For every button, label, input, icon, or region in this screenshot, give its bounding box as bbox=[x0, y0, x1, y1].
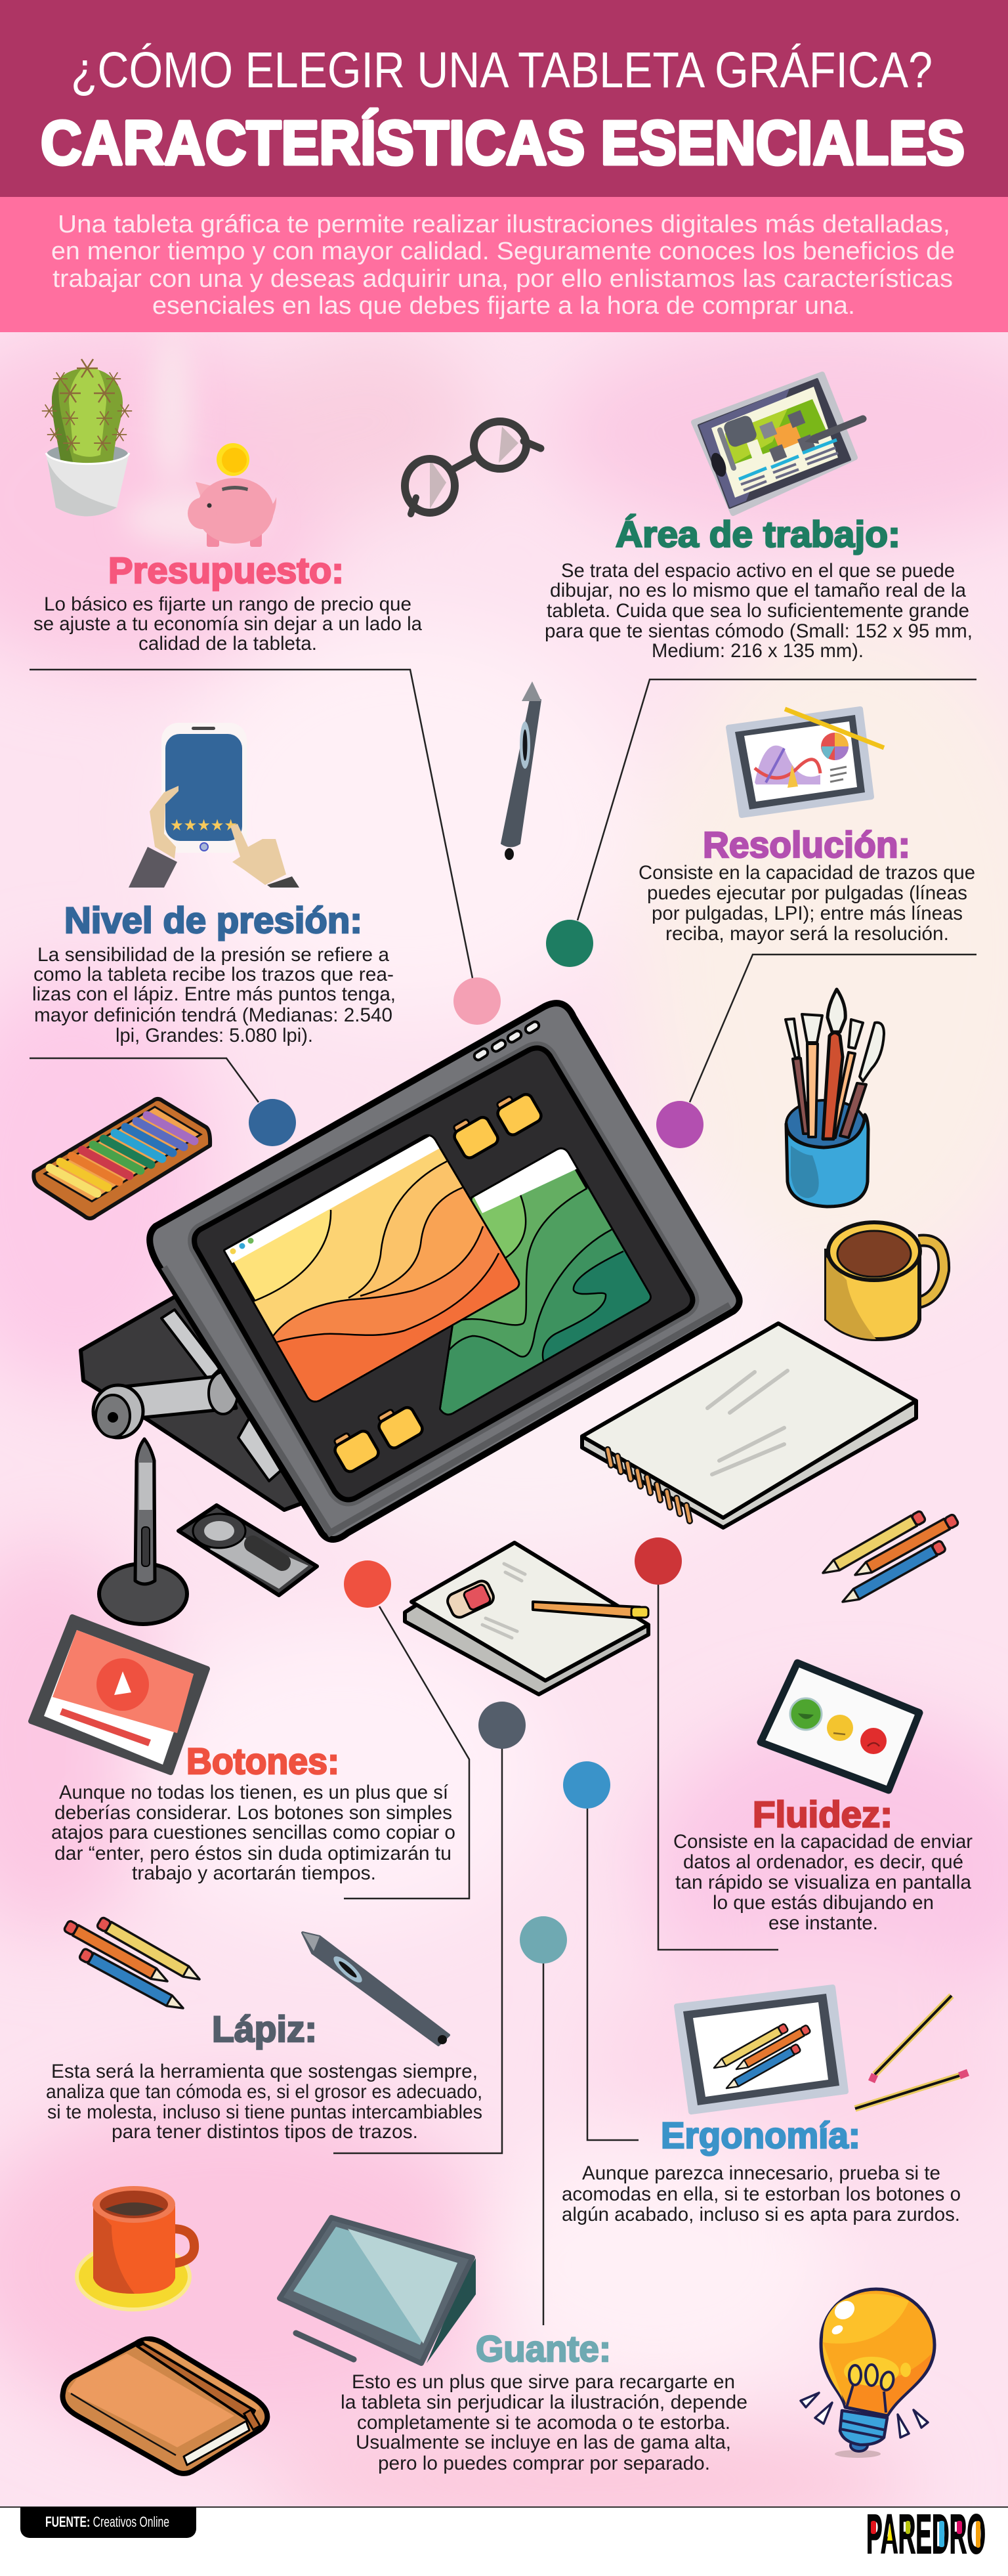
body text: como la tableta recibe los trazos que rea- bbox=[33, 964, 394, 985]
body text bbox=[341, 2371, 747, 2474]
heading: Resolución: bbox=[703, 824, 910, 865]
source tag bbox=[20, 2507, 196, 2538]
body text: dar “enter, pero éstos sin duda optimizarán tu bbox=[54, 1843, 452, 1864]
body text: Aunque parezca innecesario, prueba si te bbox=[582, 2162, 940, 2184]
body text bbox=[32, 944, 396, 1046]
cup bbox=[786, 1115, 868, 1207]
body text: la tableta sin perjudicar la ilustración, depende bbox=[341, 2392, 747, 2413]
panel: guante bbox=[341, 2328, 747, 2474]
bulb base bbox=[840, 2411, 887, 2451]
callout line and dot: ergonomía bbox=[563, 1761, 639, 2140]
folder icons bbox=[329, 1087, 543, 1474]
icon: piggy bank bbox=[188, 478, 276, 547]
callout line and dot: nivel de presión bbox=[30, 1058, 296, 1146]
eraser bbox=[445, 1578, 496, 1620]
body text: lo que estás dibujando en bbox=[713, 1892, 934, 1914]
source tag: FUENTE: Creativos Online bbox=[45, 2514, 169, 2530]
body text: atajos para cuestiones sencillas como copiar o bbox=[51, 1822, 455, 1843]
icon: remote control bbox=[178, 1505, 317, 1595]
callout line and dot: lápiz bbox=[333, 1702, 526, 2153]
callout line and dot: botones bbox=[344, 1560, 469, 1899]
body text: pero lo puedes comprar por separado. bbox=[378, 2453, 710, 2474]
icon: emoji tablet bbox=[761, 1663, 919, 1790]
body text: Aunque no todas los tienen, es un plus que sí bbox=[59, 1782, 449, 1803]
body text: Medium: 216 x 135 mm). bbox=[652, 640, 864, 662]
icon: spiral notebook bbox=[582, 1323, 916, 1528]
icon: teal tablet with pen bbox=[280, 2218, 476, 2363]
tablet body bbox=[150, 1003, 740, 1539]
body text: analiza que tan cómoda es, si el grosor es adecuado, bbox=[46, 2081, 482, 2103]
icon: orange mug on coaster bbox=[77, 2186, 194, 2309]
brush 2 bbox=[802, 1014, 822, 1137]
icon: ergonomics tablet bbox=[677, 1987, 846, 2112]
heading: Área de trabajo: bbox=[616, 513, 900, 555]
callout line and dot: fluidez bbox=[635, 1537, 778, 1950]
icon: three pencils bbox=[820, 1511, 959, 1607]
heading: Fluidez: bbox=[753, 1793, 892, 1835]
stand bbox=[81, 1297, 302, 1510]
body text: para tener distintos tipos de trazos. bbox=[112, 2121, 418, 2143]
sparks bbox=[801, 2393, 928, 2437]
heading: Nivel de presión: bbox=[64, 899, 362, 941]
body text: datos al ordenador, es decir, qué bbox=[683, 1851, 963, 1873]
body text: mayor definición tendrá (Medianas: 2.540 bbox=[34, 1004, 392, 1026]
icon: brushes cup bbox=[786, 989, 884, 1207]
body text: calidad de la tableta. bbox=[138, 633, 317, 655]
body text: dibujar, no es lo mismo que el tamaño real de la bbox=[550, 580, 966, 601]
body text: deberías considerar. Los botones son simples bbox=[54, 1802, 452, 1824]
body text: si te molesta, incluso si tiene puntas intercambiables bbox=[47, 2101, 482, 2123]
icon: phone with hands: ★★★★★ bbox=[170, 817, 238, 834]
intro text: Una tableta gráfica te permite realizar ilustraciones digitales más detalladas, bbox=[58, 211, 950, 238]
heading: Presupuesto: bbox=[108, 549, 344, 591]
callout line and dot: guante bbox=[520, 1916, 567, 2325]
icon: glasses bbox=[405, 421, 541, 514]
body text: se ajuste a tu economía sin dejar a un lado la bbox=[33, 613, 422, 635]
heading: Ergonomía: bbox=[661, 2114, 860, 2156]
body text: reciba, mayor será la resolución. bbox=[665, 923, 949, 945]
panel: resolución bbox=[639, 824, 975, 945]
panel: presupuesto bbox=[33, 549, 422, 655]
icon: video tablet bbox=[31, 1617, 207, 1772]
icon: coffee mug bbox=[826, 1222, 944, 1339]
cactus pot bbox=[46, 453, 129, 516]
body text: lizas con el lápiz. Entre más puntos tenga, bbox=[32, 983, 396, 1005]
intro text: trabajar con una y deseas adquirir una, por ello enlistamos las características bbox=[52, 265, 953, 293]
panel: ergonomía bbox=[562, 2114, 961, 2225]
screen panel bbox=[194, 1048, 692, 1499]
icon: stylus on stand bbox=[99, 1439, 187, 1624]
body text: trabajo y acortarán tiempos. bbox=[132, 1862, 376, 1884]
icon: resolution tablet bbox=[728, 709, 884, 815]
icon: pencils lápiz bbox=[64, 1917, 202, 2013]
body text: ese instante. bbox=[768, 1912, 878, 1934]
body text: por pulgadas, LPI); entre más líneas bbox=[652, 903, 963, 924]
body text: Consiste en la capacidad de trazos que bbox=[639, 862, 975, 884]
panel: lápiz bbox=[46, 2008, 482, 2143]
icon: pastel box bbox=[33, 1099, 210, 1218]
body text: Lo básico es fijarte un rango de precio que bbox=[44, 593, 411, 615]
icon: brown wallet book bbox=[62, 2339, 267, 2474]
pencil bbox=[533, 1602, 648, 1618]
panel: botones bbox=[51, 1740, 455, 1884]
intro text: en menor tiempo y con mayor calidad. Seguramente conoces los beneficios de bbox=[51, 238, 955, 265]
header band bbox=[0, 0, 1008, 197]
body text: acomodas en ella, si te estorban los botones o bbox=[562, 2183, 961, 2205]
icon: stylus pen bbox=[501, 681, 541, 860]
brush 4 bbox=[831, 1020, 863, 1138]
brush 5 bbox=[840, 1023, 884, 1138]
body text: Usualmente se incluye en las de gama alta, bbox=[356, 2432, 731, 2453]
body text: tan rápido se visualiza en pantalla bbox=[675, 1872, 971, 1893]
heading: Botones: bbox=[186, 1740, 339, 1782]
main tablet illustration bbox=[81, 1003, 740, 1539]
body text bbox=[46, 2061, 482, 2143]
icon: small notebook with eraser and pencil bbox=[405, 1543, 648, 1694]
small pen bbox=[296, 2333, 354, 2359]
heading: Guante: bbox=[476, 2328, 611, 2369]
body text bbox=[545, 560, 973, 662]
callout line and dot: resolución bbox=[656, 955, 976, 1148]
callout line and dot: presupuesto bbox=[30, 670, 501, 1025]
intro text: esenciales en las que debes fijarte a la hora de comprar una. bbox=[152, 292, 855, 320]
brush 3 bbox=[823, 989, 845, 1139]
body text bbox=[51, 1782, 455, 1884]
body text bbox=[639, 862, 975, 945]
body text: Esto es un plus que sirve para recargarte en bbox=[352, 2371, 735, 2393]
icon: work area tablet bbox=[694, 374, 863, 513]
left hand bbox=[129, 786, 178, 888]
heading: Lápiz: bbox=[212, 2008, 317, 2050]
body text bbox=[33, 593, 422, 655]
body text: puedes ejecutar por pulgadas (líneas bbox=[647, 882, 967, 904]
body text bbox=[673, 1831, 973, 1934]
icon: coin bbox=[217, 443, 249, 476]
body text: Se trata del espacio activo en el que se puede bbox=[561, 560, 955, 582]
icon: large stylus bbox=[303, 1933, 449, 2045]
intro text bbox=[51, 211, 955, 320]
body text: lpi, Grandes: 5.080 lpi). bbox=[116, 1025, 313, 1046]
body text: La sensibilidad de la presión se refiere a bbox=[37, 944, 389, 966]
body text: algún acabado, incluso si es apta para zurdos. bbox=[562, 2204, 960, 2225]
icon: phone with hands bbox=[129, 723, 299, 888]
right hand bbox=[230, 824, 299, 888]
panel: nivel de presión bbox=[32, 899, 396, 1046]
tablet buttons bbox=[472, 1020, 541, 1062]
body text: Consiste en la capacidad de enviar bbox=[673, 1831, 973, 1853]
orange window bbox=[225, 1129, 525, 1411]
icon: light bulb bbox=[801, 2289, 934, 2458]
panel: área de trabajo bbox=[545, 513, 973, 662]
body text: Esta será la herramienta que sostengas siempre, bbox=[51, 2061, 478, 2082]
panel: fluidez bbox=[673, 1793, 973, 1934]
body text bbox=[562, 2162, 961, 2225]
body text: tableta. Cuida que sea lo suficientemente grande bbox=[547, 600, 969, 622]
body text: completamente si te acomoda o te estorba. bbox=[357, 2412, 730, 2434]
footer bbox=[0, 2503, 1008, 2576]
intro band bbox=[0, 197, 1008, 332]
body text: para que te sientas cómodo (Small: 152 x 95 mm, bbox=[545, 620, 973, 642]
brush 1 bbox=[786, 1019, 808, 1134]
callout line and dot: área de trabajo bbox=[546, 679, 976, 967]
icon: loose pencils bbox=[855, 1996, 968, 2109]
icon: cactus bbox=[42, 359, 132, 516]
green window bbox=[439, 1148, 652, 1415]
